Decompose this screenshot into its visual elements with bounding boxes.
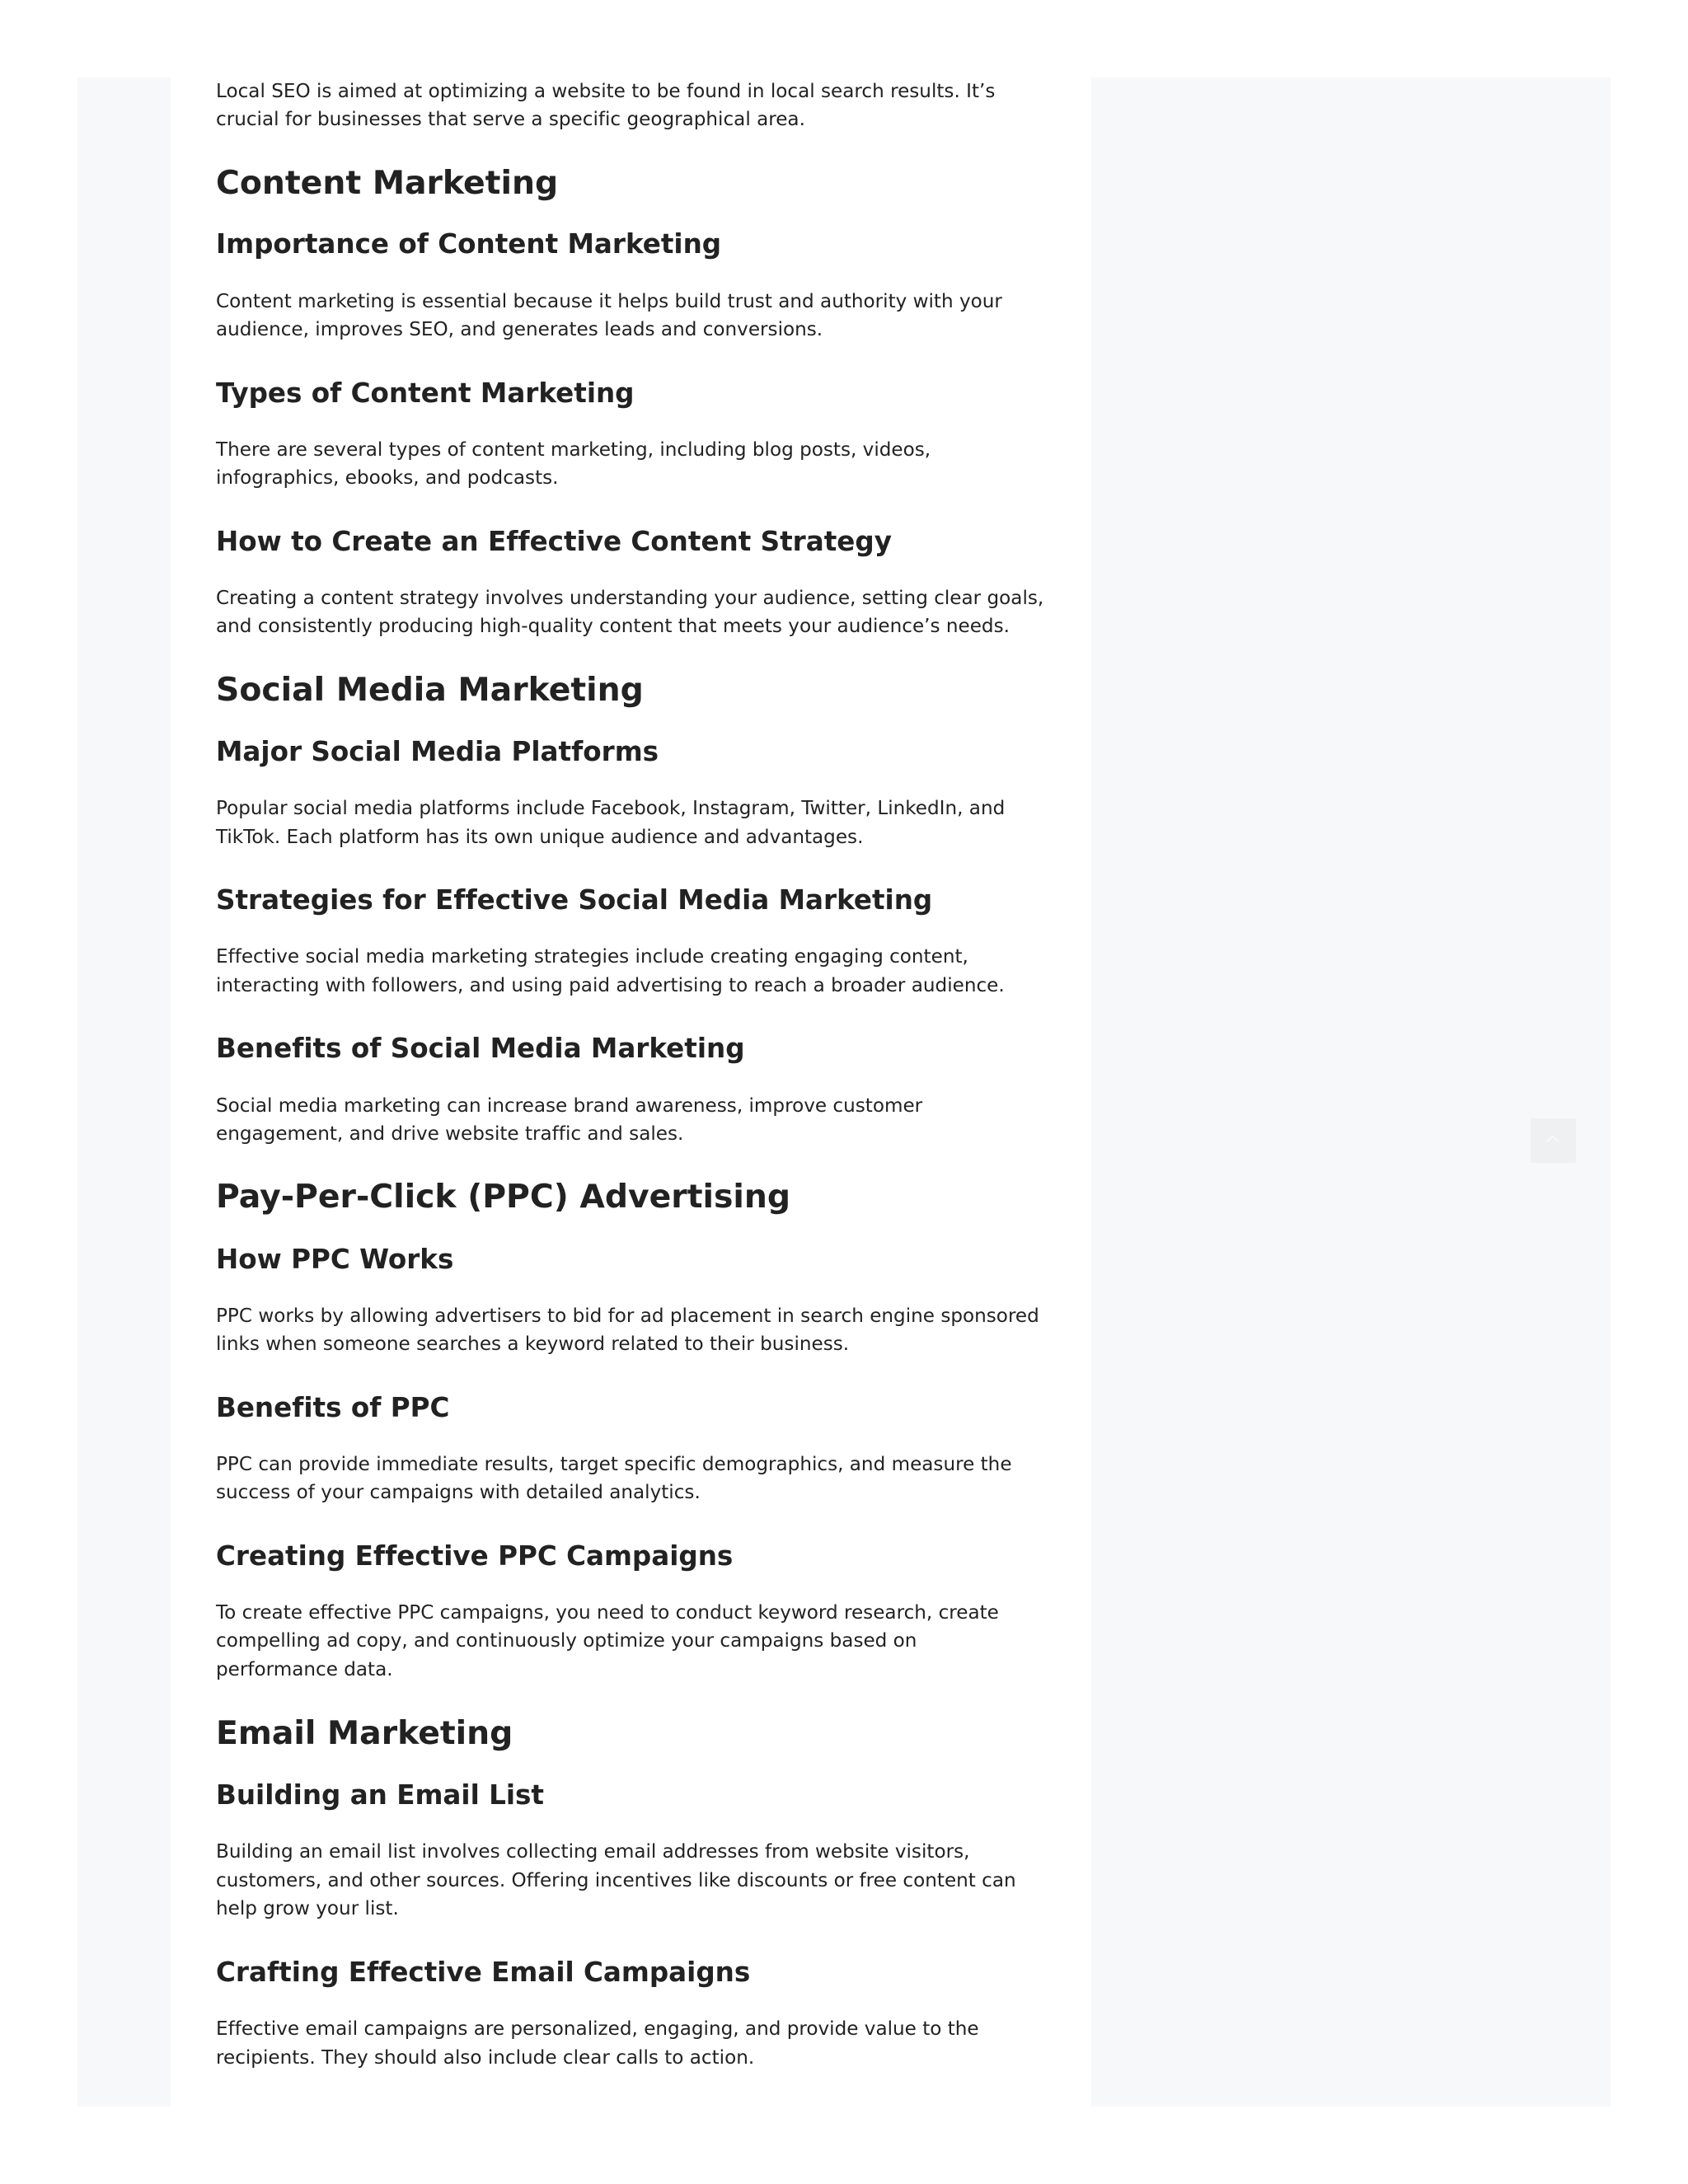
text: how PPC works paragraph [216, 1305, 1039, 1355]
text: importance paragraph: Content marketing is essential because it helps build trust and authority with your [216, 290, 1002, 312]
text: types paragraph: infographics, ebooks, and podcasts. [216, 467, 559, 489]
text: email campaigns paragraph: Effective email campaigns are personalized, engaging, and provide value to the [216, 2018, 979, 2040]
text: PPC benefits paragraph: success of your campaigns with detailed analytics. [216, 1482, 701, 1503]
text: local SEO intro: Local SEO is aimed at optimizing a website to be found in local search results. It’s [216, 81, 995, 102]
text: local SEO intro [216, 81, 995, 130]
heading: Email Marketing: Email Marketing [216, 1714, 513, 1752]
subheading: Benefits of PPC: Benefits of PPC [216, 1391, 449, 1422]
text: content strategy paragraph: and consistently producing high-quality content that meets your audience’s needs. [216, 616, 1010, 637]
subheading: Strategies for Effective Social Media Marketing: Strategies for Effective Social Media Marketing [216, 884, 932, 916]
subheading: How to Create an Effective Content Strategy: How to Create an Effective Content Strategy [216, 526, 892, 557]
subheading: Benefits of Social Media Marketing: Benefits of Social Media Marketing [216, 1033, 745, 1064]
button: scroll to top [1531, 1118, 1576, 1163]
text: PPC campaigns paragraph: To create effective PPC campaigns, you need to conduct keyword research, create [216, 1602, 999, 1624]
heading: Pay-Per-Click (PPC) Advertising: Pay-Per-Click (PPC) Advertising [216, 1178, 790, 1216]
subheading: Types of Content Marketing: Types of Content Marketing [216, 377, 635, 409]
text: platforms paragraph [216, 798, 1005, 848]
text: strategies paragraph: Effective social media marketing strategies include creating engaging content, [216, 946, 968, 968]
text: importance paragraph: audience, improves SEO, and generates leads and conversions. [216, 319, 823, 340]
panel: right sidebar background [1091, 77, 1611, 2107]
text: types paragraph [216, 438, 931, 489]
text: PPC campaigns paragraph [216, 1602, 999, 1680]
heading: Social Media Marketing: Social Media Marketing [216, 671, 644, 709]
text: content strategy paragraph [216, 587, 1043, 637]
subheading: Building an Email List: Building an Email List [216, 1779, 544, 1811]
text: PPC benefits paragraph [216, 1454, 1012, 1503]
text: PPC campaigns paragraph: performance data. [216, 1659, 393, 1680]
panel: left sidebar background [77, 77, 171, 2107]
icon: chevron up [1546, 1136, 1559, 1142]
text: strategies paragraph [216, 946, 1005, 996]
text: email list paragraph: Building an email list involves collecting email addresses from website visitors, [216, 1841, 969, 1863]
text: social benefits paragraph [216, 1094, 923, 1145]
text: local SEO intro: crucial for businesses that serve a specific geographical area. [216, 109, 805, 130]
text: email campaigns paragraph [216, 2018, 979, 2069]
text: social benefits paragraph: Social media marketing can increase brand awareness, improve customer [216, 1094, 922, 1116]
subheading: Creating Effective PPC Campaigns: Creating Effective PPC Campaigns [216, 1540, 733, 1571]
text: importance paragraph [216, 290, 1002, 340]
subheading: Major Social Media Platforms: Major Social Media Platforms [216, 736, 659, 767]
subheading: Importance of Content Marketing: Importance of Content Marketing [216, 228, 721, 260]
text: how PPC works paragraph: PPC works by allowing advertisers to bid for ad placement in search engine sponsored [216, 1305, 1039, 1327]
text: social benefits paragraph: engagement, and drive website traffic and sales. [216, 1123, 683, 1145]
text: platforms paragraph: TikTok. Each platform has its own unique audience and advantages. [216, 827, 863, 848]
text: platforms paragraph: Popular social media platforms include Facebook, Instagram, Twitter, LinkedIn, and [216, 798, 1005, 819]
text: email campaigns paragraph: recipients. They should also include clear calls to action. [216, 2047, 754, 2069]
text: types paragraph: There are several types of content marketing, including blog posts, videos, [216, 438, 931, 460]
text: email list paragraph: customers, and other sources. Offering incentives like discounts or free content can [216, 1870, 1016, 1891]
text: strategies paragraph: interacting with followers, and using paid advertising to reach a broader audience. [216, 975, 1005, 996]
text: how PPC works paragraph: links when someone searches a keyword related to their business. [216, 1333, 849, 1355]
heading: Content Marketing: Content Marketing [216, 163, 558, 201]
text: PPC benefits paragraph: PPC can provide immediate results, target specific demographics, and measure the [216, 1454, 1012, 1475]
text: email list paragraph [216, 1841, 1016, 1919]
subheading: How PPC Works: How PPC Works [216, 1243, 453, 1274]
text: email list paragraph: help grow your list. [216, 1898, 399, 1919]
subheading: Crafting Effective Email Campaigns: Crafting Effective Email Campaigns [216, 1957, 750, 1988]
text: PPC campaigns paragraph: compelling ad copy, and continuously optimize your campaigns based on [216, 1630, 917, 1652]
text: content strategy paragraph: Creating a content strategy involves understanding your audience, setting clear goals, [216, 587, 1043, 608]
